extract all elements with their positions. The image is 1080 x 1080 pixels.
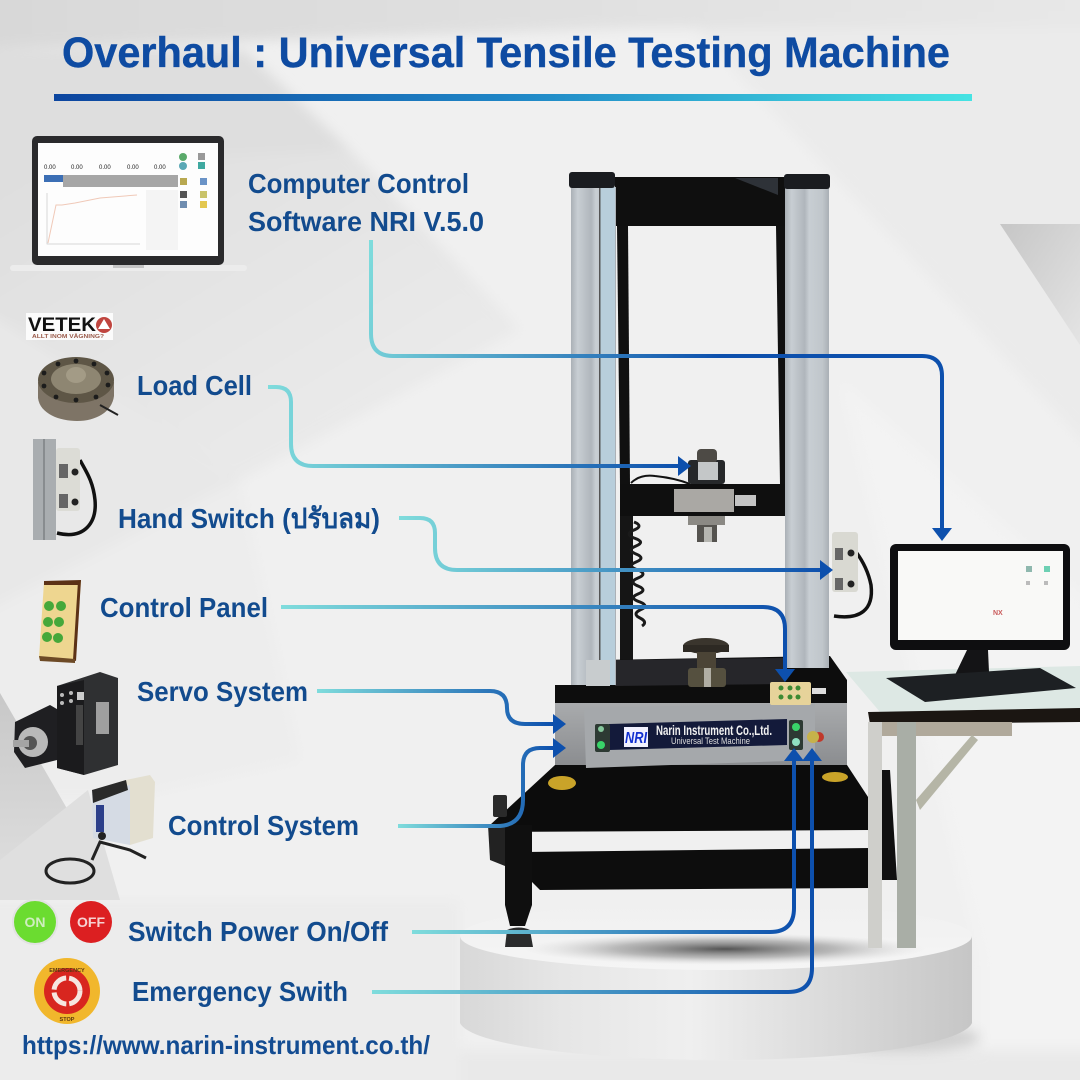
display text <box>656 722 772 747</box>
icon: servo system <box>13 672 118 775</box>
icon: off button <box>70 901 112 943</box>
machine: tensile tester <box>488 172 897 947</box>
left column <box>569 172 616 686</box>
arrow: control system <box>398 738 566 826</box>
logo: VETEK: ALLT INOM VÄGNING? <box>32 333 104 340</box>
icon: laptop with software <box>10 136 247 271</box>
icon: laptop with software: 0.00 <box>154 165 166 171</box>
lower grip <box>683 638 729 687</box>
icon: on button: ON <box>24 914 46 930</box>
arrow: hand switch <box>399 518 833 580</box>
label: computer control software: Computer Control <box>248 168 469 199</box>
coiled cable <box>629 522 645 626</box>
arrow: control panel <box>281 607 795 682</box>
display text: Narin Instrument Co.,Ltd. <box>656 722 772 738</box>
callout arrows <box>268 240 952 992</box>
icon: laptop with software: 0.00 <box>44 165 56 171</box>
label: control panel: Control Panel <box>100 592 268 623</box>
hand switch on machine <box>832 532 871 617</box>
icon: laptop with software: 0.00 <box>99 165 111 171</box>
arrow: load cell <box>268 387 691 476</box>
pedestal <box>460 902 980 1060</box>
logo: VETEK: VETEK <box>28 315 96 336</box>
arrow: switch power <box>412 748 804 932</box>
logo: VETEK <box>26 313 113 340</box>
top cross beam <box>615 177 785 226</box>
right column <box>784 174 830 668</box>
rear black strips <box>617 226 785 686</box>
load cell on machine <box>631 449 756 542</box>
monitor screen content <box>993 566 1050 617</box>
icon: control system <box>46 775 155 883</box>
icon: emergency stop: EMERGENCY <box>49 968 85 974</box>
title: Overhaul : Universal Tensile Testing Machine <box>62 29 950 77</box>
side table <box>846 666 1080 948</box>
label: switch power: Switch Power On/Off <box>128 916 389 947</box>
logo: NRI: NRI <box>625 730 647 747</box>
label: control system: Control System <box>168 810 359 841</box>
machine base top <box>555 656 847 704</box>
control panel on machine <box>770 682 826 705</box>
cross head <box>620 484 785 516</box>
label: computer control software <box>248 168 484 237</box>
label: hand switch: Hand Switch (ปรับลม) <box>118 503 380 534</box>
machine stand <box>488 765 897 947</box>
label: emergency switch: Emergency Swith <box>132 976 348 1007</box>
control box <box>555 703 847 768</box>
label: load cell: Load Cell <box>137 370 252 401</box>
icon: hand switch <box>33 439 95 540</box>
icon: control panel <box>39 580 81 663</box>
display text: Universal Test Machine <box>671 736 750 747</box>
arrow: computer control software to monitor <box>371 240 952 541</box>
icon: on button <box>13 900 57 944</box>
monitor screen content: NX <box>993 610 1003 617</box>
monitor stand <box>955 650 989 675</box>
website url: https://www.narin-instrument.co.th/ <box>22 1030 430 1060</box>
icon: emergency stop <box>34 958 100 1024</box>
title underline <box>54 94 972 101</box>
icon: laptop with software: 0.00 <box>127 165 139 171</box>
icon: load cell <box>38 357 118 421</box>
arrow: emergency switch <box>372 748 822 992</box>
label: servo system: Servo System <box>137 676 308 707</box>
arrow: servo system <box>317 691 566 734</box>
icon: off button: OFF <box>77 914 105 930</box>
computer monitor <box>886 544 1076 702</box>
label: computer control software: Software NRI V.5.0 <box>248 206 484 237</box>
keyboard <box>886 668 1076 702</box>
icon: laptop with software: 0.00 <box>71 165 83 171</box>
icon: emergency stop: STOP <box>60 1017 75 1023</box>
